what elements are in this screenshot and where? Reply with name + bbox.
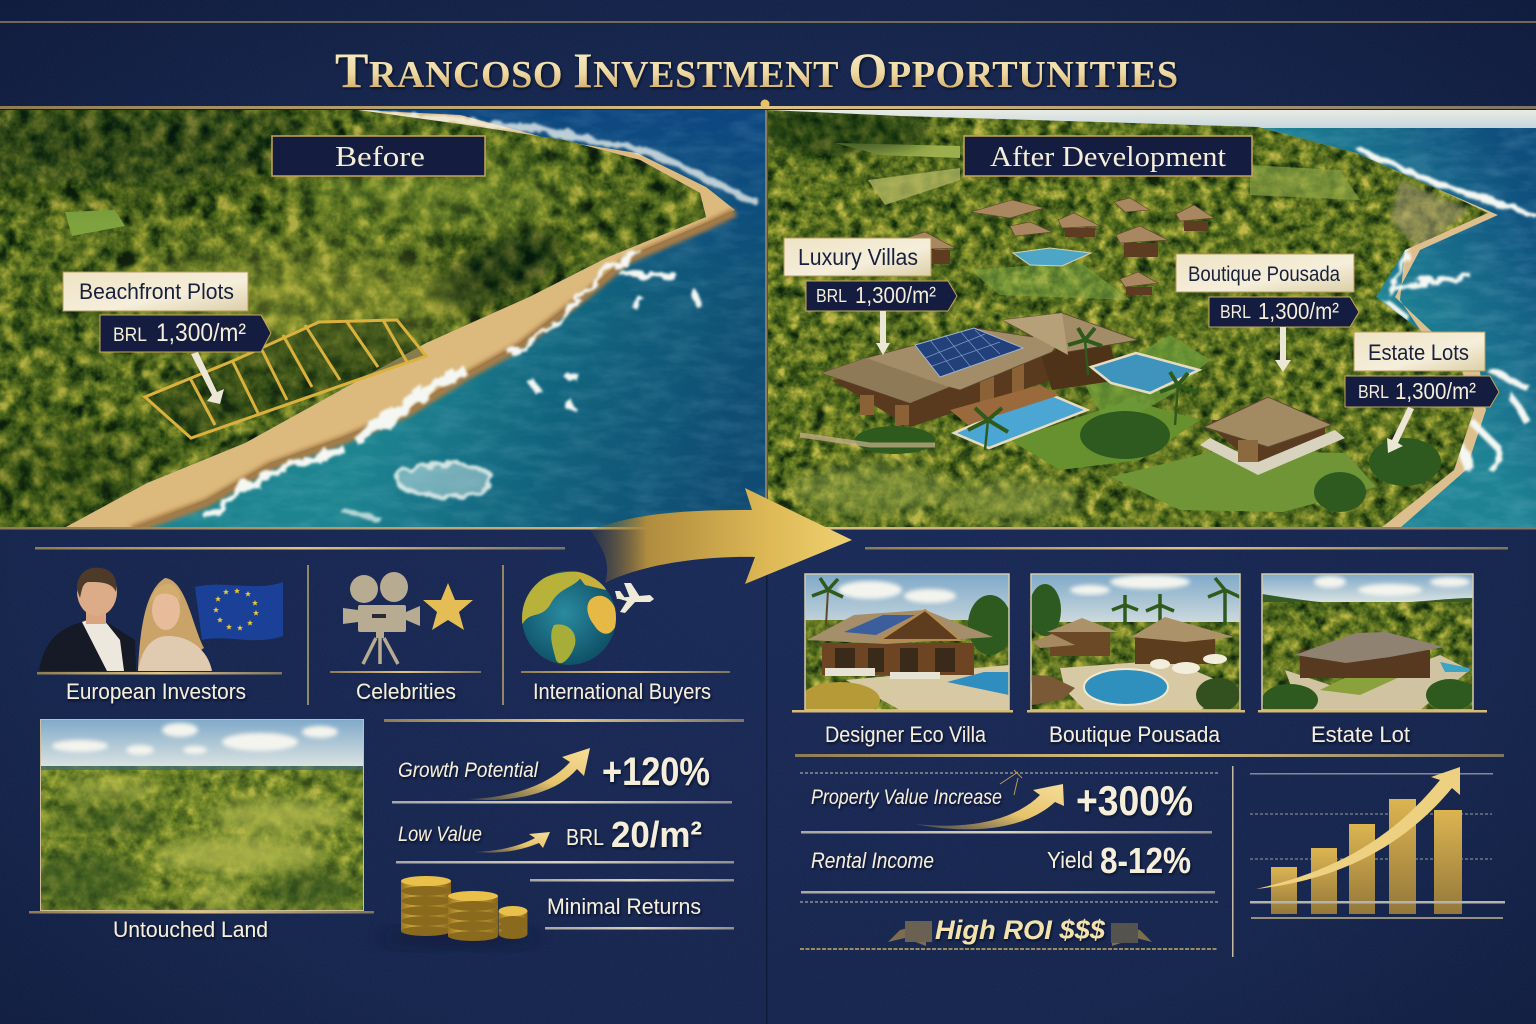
man xyxy=(39,568,136,671)
metric: low value xyxy=(398,823,550,853)
label: european investors: European Investors xyxy=(66,679,246,704)
icon: star xyxy=(423,583,473,630)
main villa xyxy=(822,313,1138,427)
arrow: growth curve xyxy=(1256,767,1460,889)
palm trees xyxy=(968,328,1197,450)
value: BRL 20/m² xyxy=(566,814,702,855)
label: designer eco villa: Designer Eco Villa xyxy=(825,722,987,747)
woman xyxy=(138,578,212,671)
price tag: estate: 1,300/m² xyxy=(1395,378,1476,404)
metric: rental income: Rental Income xyxy=(811,848,934,873)
price tag: pousada xyxy=(1209,297,1359,327)
label: boutique pousada: Boutique Pousada xyxy=(1188,263,1340,286)
plots outline xyxy=(145,320,426,438)
icon: gold coins xyxy=(380,876,540,947)
panel: after development scene xyxy=(750,105,1536,528)
label: boutique pousada: Boutique Pousada xyxy=(1049,722,1221,747)
arrow: to pousada xyxy=(1275,327,1291,372)
icon: film camera xyxy=(343,572,420,664)
label: beachfront plots: Beachfront Plots xyxy=(79,279,234,304)
label: minimal returns: Minimal Returns xyxy=(547,894,701,919)
icon: airplane xyxy=(615,583,654,613)
banner: high roi: High ROI $$$ xyxy=(935,915,1106,945)
value: yield 8-12% xyxy=(1047,840,1191,881)
small bungalow xyxy=(1200,397,1345,475)
price tag: beachfront: BRL xyxy=(113,325,147,346)
pools xyxy=(954,393,1087,448)
label: international buyers: International Buyers xyxy=(533,679,711,704)
big gold arrow xyxy=(590,488,852,584)
arrow: growth xyxy=(468,748,590,800)
metric: growth potential: Growth Potential xyxy=(398,759,539,782)
price tag: pousada: BRL xyxy=(1220,302,1251,322)
label: after development: After Development xyxy=(990,142,1226,173)
panel: before scene xyxy=(0,95,765,530)
label: estate lot: Estate Lot xyxy=(1311,722,1410,747)
bushes xyxy=(855,411,1441,512)
value: +120%: +120% xyxy=(602,750,710,794)
value: yield 8-12%: Yield xyxy=(1047,847,1093,873)
arrow: to estate xyxy=(1387,407,1414,453)
price tag: pousada: 1,300/m² xyxy=(1258,298,1339,324)
price tag: beachfront xyxy=(100,315,271,352)
metric: property value increase xyxy=(811,784,1064,829)
arrow: property value xyxy=(915,784,1064,829)
metric: low value: Low Value xyxy=(398,823,482,846)
value: BRL 20/m²: BRL xyxy=(566,824,604,850)
label: before xyxy=(272,136,485,176)
back resort buildings xyxy=(890,198,1214,287)
price tag: villas: BRL xyxy=(816,286,847,306)
price tag: villas xyxy=(806,281,957,311)
label: untouched land: Untouched Land xyxy=(113,917,268,942)
banner: high roi xyxy=(888,915,1152,946)
price tag: beachfront: 1,300/m² xyxy=(156,319,246,347)
label: after development xyxy=(964,136,1252,176)
photo: designer eco villa xyxy=(806,574,1008,710)
metric: growth potential xyxy=(398,748,590,800)
label: luxury villas xyxy=(784,238,931,276)
price tag: estate: BRL xyxy=(1358,382,1389,402)
value: BRL 20/m²: 20/m² xyxy=(611,814,702,855)
label: estate lots xyxy=(1354,332,1485,371)
label: boutique pousada xyxy=(1176,254,1354,292)
icon: globe xyxy=(522,571,618,665)
price tag: estate xyxy=(1345,376,1499,407)
label: luxury villas: Luxury Villas xyxy=(798,244,918,270)
value: +300%: +300% xyxy=(1076,777,1193,824)
metric: property value increase: Property Value Increase xyxy=(811,786,1002,809)
title: TRANCOSO INVESTMENT OPPORTUNITIES xyxy=(335,42,1178,98)
back pool xyxy=(1013,248,1091,266)
value: yield 8-12%: 8-12% xyxy=(1100,840,1191,881)
photo: estate lot xyxy=(1262,574,1474,716)
arrow: to plots xyxy=(191,352,224,404)
chart: growth bars xyxy=(1250,767,1505,919)
icon: european investors xyxy=(39,568,283,671)
arrow: low value xyxy=(475,832,550,853)
price tag: villas: 1,300/m² xyxy=(855,282,936,308)
arrow: to villa xyxy=(876,311,890,355)
icon: eu flag xyxy=(195,582,283,640)
label: celebrities: Celebrities xyxy=(356,679,456,704)
label: estate lots: Estate Lots xyxy=(1368,340,1469,365)
label: before: Before xyxy=(335,141,425,173)
label: beachfront plots xyxy=(63,272,248,311)
photo: boutique pousada xyxy=(1029,574,1240,712)
photo: untouched land xyxy=(30,719,364,911)
